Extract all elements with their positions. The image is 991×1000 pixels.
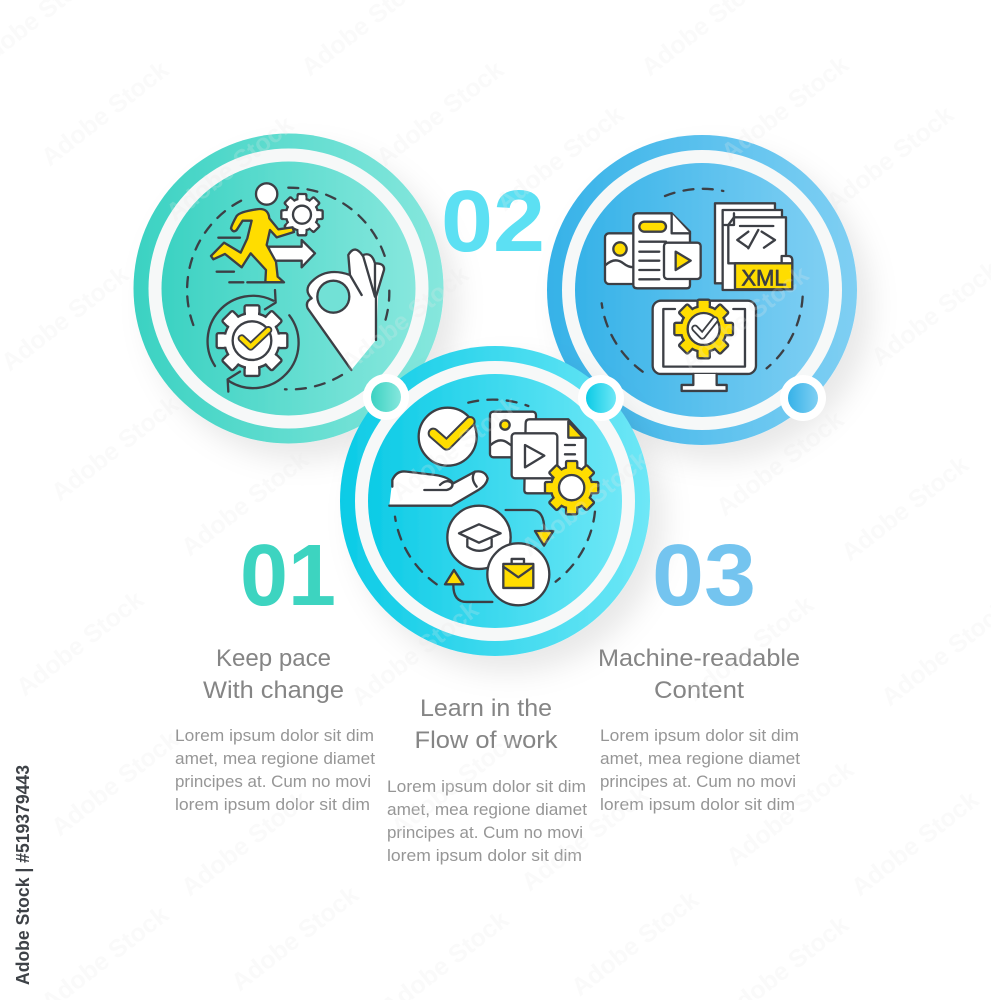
- watermark pattern: Adobe Stock: [491, 101, 629, 217]
- text block: column 2 body: Lorem ipsum dolor sit dim: [387, 778, 586, 796]
- heading: keep pace with change: [203, 645, 344, 704]
- watermark pattern: Adobe Stock: [11, 586, 149, 702]
- panel: circle 3 learn in the flow of work: [340, 346, 650, 656]
- watermark pattern: Adobe Stock: [721, 756, 859, 872]
- heading: keep pace with change: Keep pace: [216, 645, 331, 672]
- watermark pattern: Adobe Stock: [176, 446, 314, 562]
- text block: column 1 body: principes at. Cum no movi: [175, 773, 371, 791]
- watermark pattern: Adobe Stock: [846, 786, 984, 902]
- watermark pattern: Adobe Stock: [336, 261, 474, 377]
- watermark pattern: Adobe Stock: [566, 886, 704, 1000]
- watermark pattern: Adobe Stock: [176, 786, 314, 902]
- watermark pattern: Adobe Stock: [161, 111, 299, 227]
- text block: column 1 body: lorem ipsum dolor sit dim: [175, 796, 370, 814]
- watermark pattern: Adobe Stock: [46, 391, 184, 507]
- icon: media files, XML file and monitor with gear: [602, 189, 803, 391]
- heading: learn in the flow of work: Learn in the: [420, 695, 552, 722]
- watermark pattern: Adobe Stock: [386, 391, 524, 507]
- heading: learn in the flow of work: Flow of work: [414, 727, 559, 754]
- connector node 3: [780, 375, 826, 421]
- watermark pattern: Adobe Stock: [716, 51, 854, 167]
- heading: keep pace with change: With change: [203, 677, 344, 704]
- heading: machine-readable content: [598, 645, 800, 704]
- watermark pattern: Adobe Stock: [226, 881, 364, 997]
- heading: machine-readable content: Machine-readable: [598, 645, 800, 672]
- watermark pattern: Adobe Stock: [46, 726, 184, 842]
- text block: column 3 body: principes at. Cum no movi: [600, 773, 796, 791]
- watermark pattern: Adobe Stock: [0, 261, 134, 377]
- vertical stock id: Adobe Stock | #519379443: [13, 765, 33, 985]
- watermark pattern: Adobe Stock: [386, 726, 524, 842]
- text block: column 3 body: [600, 727, 800, 814]
- panel: circle 2 machine-readable content: [547, 135, 857, 445]
- watermark pattern: Adobe Stock: [516, 446, 654, 562]
- text block: column 2 body: [387, 778, 587, 865]
- watermark pattern: Adobe Stock: [676, 261, 814, 377]
- text block: column 2 body: principes at. Cum no movi: [387, 824, 583, 842]
- number 01: 01: [240, 527, 336, 624]
- connector node 1: [363, 374, 409, 420]
- text block: column 1 body: Lorem ipsum dolor sit dim: [175, 727, 374, 745]
- watermark pattern: Adobe Stock: [346, 596, 484, 712]
- text block: column 3 body: amet, mea regione diamet: [600, 750, 800, 768]
- watermark pattern: Adobe Stock: [371, 56, 509, 172]
- icon: hand with check, media files, graduation cap and briefcase: [389, 400, 598, 605]
- watermark pattern: Adobe Stock: [36, 56, 174, 172]
- text block: column 1 body: amet, mea regione diamet: [175, 750, 375, 768]
- watermark pattern: Adobe Stock: [516, 781, 654, 897]
- watermark pattern: Adobe Stock: [821, 101, 959, 217]
- watermark pattern: Adobe Stock: [681, 591, 819, 707]
- connector node 2: [578, 375, 624, 421]
- text block: column 2 body: amet, mea regione diamet: [387, 801, 587, 819]
- text block: column 1 body: [175, 727, 375, 814]
- number 02: 02: [441, 173, 545, 270]
- number 03: 03: [652, 527, 756, 624]
- icon: media files, XML file and monitor with gear: XML: [741, 265, 787, 290]
- icon: running person, gears and OK hand: [187, 183, 389, 392]
- heading: machine-readable content: Content: [654, 677, 744, 704]
- heading: learn in the flow of work: [414, 695, 559, 754]
- watermark pattern: Adobe Stock: [836, 451, 974, 567]
- circle 2 badge: [547, 135, 857, 445]
- text block: column 2 body: lorem ipsum dolor sit dim: [387, 847, 582, 865]
- circle 3 badge: [340, 346, 650, 656]
- circle 1 badge: [134, 134, 444, 444]
- watermark pattern: Adobe Stock: [711, 406, 849, 522]
- text block: column 3 body: lorem ipsum dolor sit dim: [600, 796, 795, 814]
- panel: circle 1 keep pace with change: [134, 134, 444, 444]
- text block: column 3 body: Lorem ipsum dolor sit dim: [600, 727, 799, 745]
